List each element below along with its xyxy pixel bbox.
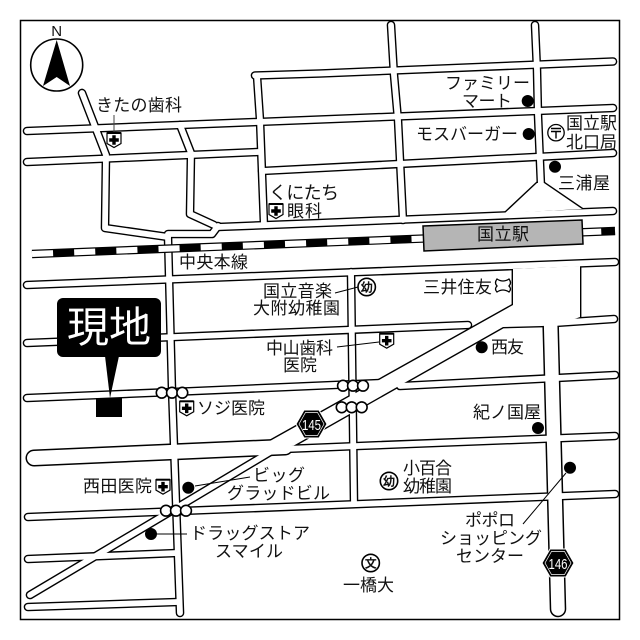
route marker 145: 145: [302, 417, 321, 434]
landmark: Kitano dental: [96, 96, 182, 148]
landmark: Big Grad building: ビッグ: [253, 466, 305, 485]
site marker: 現地: 現地: [67, 304, 151, 351]
landmark: Nakayama dental: 医院: [283, 356, 317, 375]
landmark: Mitsui Sumitomo: 三井住友: [423, 278, 492, 297]
compass: [31, 23, 83, 91]
landmark: Nakayama dental: 中山歯科: [266, 339, 333, 358]
landmark: Sayuri kindergarten: [380, 459, 452, 496]
landmark: Poporo shopping center: センター: [456, 547, 524, 566]
landmark: Kinokuniya: 紀ノ国屋: [473, 403, 541, 422]
landmark: FamilyMart: [445, 74, 534, 111]
landmark: Nishida clinic: 西田医院: [83, 477, 152, 496]
railway: Chuo line: [32, 231, 615, 254]
landmark: Sayuri kindergarten: 幼稚園: [403, 477, 452, 496]
landmark: Poporo shopping center: ショッピング: [440, 529, 542, 548]
landmark: Kunitachi eye clinic: くにたち: [269, 183, 339, 203]
label: Chuo line: 中央本線: [179, 253, 248, 272]
landmark: Kitano dental: きたの歯科: [96, 96, 182, 115]
landmark: Big Grad building: [182, 466, 330, 503]
site marker: 現地: [57, 298, 161, 417]
landmark: Sayuri kindergarten: 幼: [383, 474, 395, 488]
landmark: Hitotsubashi University: 一橋大: [343, 576, 394, 595]
landmark: Drugstore Smile: スマイル: [215, 542, 283, 561]
landmark: post office: 国立駅: [566, 114, 617, 133]
landmark: Hitotsubashi University: 文: [365, 556, 377, 570]
station: Kunitachi: [423, 220, 583, 251]
landmark: MOS Burger: モスバーガー: [416, 125, 518, 144]
landmark: Kunitachi eye clinic: 眼科: [287, 202, 322, 221]
landmark: FamilyMart: マート: [462, 92, 512, 111]
landmark: Seiyu: [476, 338, 524, 357]
landmark: post office: [548, 114, 617, 152]
landmark: Poporo shopping center: [440, 462, 576, 566]
landmark: Yoji clinic: ソジ医院: [197, 399, 265, 418]
landmark: Miuraya: [549, 161, 610, 193]
landmark: Kunitachi eye clinic: [269, 183, 339, 221]
compass: N: [51, 23, 62, 40]
landmark: Seiyu: 西友: [491, 338, 524, 357]
landmark: music kindergarten: 大附幼稚園: [253, 299, 340, 318]
landmark: post office: 北口局: [566, 133, 617, 152]
route marker 145: [296, 410, 327, 438]
station: Kunitachi: 国立駅: [477, 225, 529, 244]
landmark: Miuraya: 三浦屋: [558, 174, 610, 193]
landmark: Drugstore Smile: ドラッグストア: [190, 524, 310, 543]
landmark: music kindergarten: 国立音楽: [263, 282, 332, 301]
landmark: music kindergarten: [253, 278, 375, 318]
landmark: Big Grad building: グラッドビル: [227, 484, 330, 503]
traffic signals: [156, 380, 368, 516]
landmark: Sayuri kindergarten: 小百合: [403, 459, 452, 478]
route marker 146: 146: [548, 556, 568, 573]
landmark: Nakayama dental: [266, 334, 394, 375]
landmark: Hitotsubashi University: [343, 554, 394, 595]
landmark: Kinokuniya: [473, 403, 544, 434]
landmark: music kindergarten: 幼: [361, 280, 373, 294]
landmark: FamilyMart: ファミリー: [445, 74, 530, 93]
landmark: Poporo shopping center: ポポロ: [465, 511, 515, 530]
landmark: Drugstore Smile: [145, 524, 310, 561]
route marker 146: [542, 549, 574, 577]
